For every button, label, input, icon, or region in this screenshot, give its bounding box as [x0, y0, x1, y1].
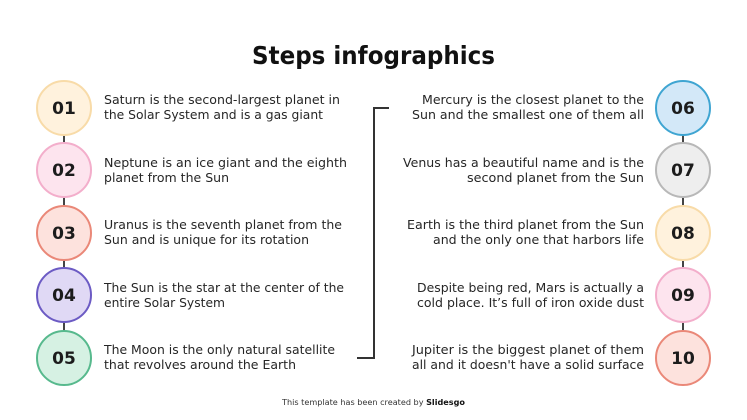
step 07: second planet from the Sun: [467, 170, 644, 185]
step 10: Jupiter is the biggest planet of them: [411, 342, 644, 357]
footer credit: This template has been created by Slidesgo: [281, 398, 466, 407]
step 07: 07: [671, 161, 695, 181]
step 05: that revolves around the Earth: [104, 357, 296, 372]
step 01: [37, 81, 340, 135]
left timeline connector: [63, 130, 65, 340]
step 06: 06: [671, 99, 695, 119]
step 07: [403, 143, 710, 197]
step 10: 10: [671, 349, 695, 369]
step 02: planet from the Sun: [104, 170, 229, 185]
step 08: 08: [671, 224, 695, 244]
central bracket: [357, 108, 389, 358]
step 08: and the only one that harbors life: [433, 232, 644, 247]
step 01: Saturn is the second-largest planet in: [104, 92, 340, 107]
step 01: the Solar System and is a gas giant: [104, 107, 323, 122]
step 10: all and it doesn't have a solid surface: [412, 357, 644, 372]
step 03: Sun and is unique for its rotation: [104, 232, 309, 247]
step 10: [411, 331, 710, 385]
step 09: 09: [671, 286, 695, 306]
step 08: [407, 206, 710, 260]
step 06: [412, 81, 710, 135]
step 02: Neptune is an ice giant and the eighth: [104, 155, 347, 170]
step 05: [37, 331, 335, 385]
step 09: [417, 268, 710, 322]
step 09: Despite being red, Mars is actually a: [417, 280, 644, 295]
step 08: Earth is the third planet from the Sun: [407, 217, 644, 232]
step 06: Sun and the smallest one of them all: [412, 107, 644, 122]
step 09: cold place. It’s full of iron oxide dust: [417, 295, 644, 310]
step 04: 04: [52, 286, 76, 306]
step 07: Venus has a beautiful name and is the: [403, 155, 644, 170]
step 03: 03: [52, 224, 76, 244]
step 01: 01: [52, 99, 76, 119]
step 04: entire Solar System: [104, 295, 225, 310]
step 02: [37, 143, 347, 197]
step 05: The Moon is the only natural satellite: [103, 342, 335, 357]
step 03: Uranus is the seventh planet from the: [104, 217, 342, 232]
step 03: [37, 206, 342, 260]
right timeline connector: [682, 130, 684, 340]
step 04: The Sun is the star at the center of the: [103, 280, 344, 295]
step 02: 02: [52, 161, 76, 181]
step 06: Mercury is the closest planet to the: [422, 92, 644, 107]
step 05: 05: [52, 349, 76, 369]
title: Steps infographics: [252, 41, 495, 70]
step 04: [37, 268, 344, 322]
